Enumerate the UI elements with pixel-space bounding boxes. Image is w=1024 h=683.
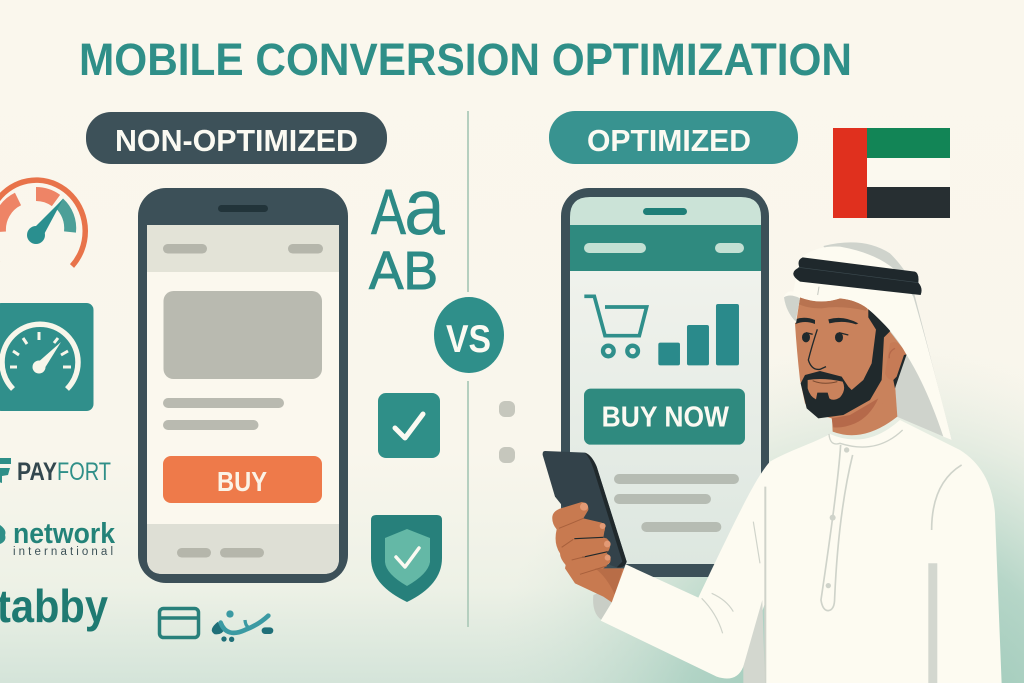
beard <box>801 329 884 418</box>
icon: speedometer orange <box>0 180 85 266</box>
headdress crease <box>818 287 819 295</box>
text placeholder lines <box>163 398 284 430</box>
face <box>795 297 907 418</box>
handheld phone <box>543 451 627 567</box>
logo: network international <box>0 518 116 558</box>
thobe side shadow <box>743 563 937 683</box>
headdress left fold <box>784 296 800 322</box>
buy button <box>163 456 322 503</box>
logo: PayFort: FORT <box>57 458 111 486</box>
headdress front <box>784 246 952 440</box>
headband seam <box>798 267 918 283</box>
thobe folds and seams <box>702 430 962 683</box>
logo: tabby: tabby <box>0 580 108 632</box>
decorative gray dots <box>499 401 515 463</box>
buy now button: BUY NOW <box>602 402 730 434</box>
icon: security shield <box>371 515 442 602</box>
center divider line <box>467 111 469 627</box>
logo: network international: network <box>13 518 116 550</box>
thobe body and arm <box>601 420 1002 683</box>
phone: optimized <box>561 188 769 577</box>
buy now button <box>584 389 745 445</box>
icon: typography samples <box>369 162 445 301</box>
buy button: BUY <box>217 466 267 497</box>
icon: shopping cart <box>584 296 647 356</box>
icon: typography samples: A <box>371 176 406 248</box>
heading pill: optimized <box>549 111 798 164</box>
neck shadow under beard <box>832 398 878 427</box>
eyelids and nose <box>806 329 848 369</box>
text placeholder lines <box>614 474 739 532</box>
forehead shadow <box>799 297 867 311</box>
eyes <box>802 332 843 342</box>
ear <box>885 342 906 380</box>
fingertips <box>580 503 611 561</box>
headband agal <box>793 257 922 295</box>
UAE flag <box>833 128 950 218</box>
heading pill: non-optimized <box>86 112 387 164</box>
head and headdress <box>784 242 952 440</box>
logo: PayFort <box>0 458 111 486</box>
icon: credit card <box>160 608 198 638</box>
VS badge <box>434 297 504 373</box>
finger creases <box>559 518 607 574</box>
hand <box>552 502 625 603</box>
heading pill: non-optimized: NON-OPTIMIZED <box>115 123 358 158</box>
hair behind ear <box>893 354 907 388</box>
phone speaker notch <box>218 205 268 212</box>
man in kandura holding phone <box>543 242 1002 683</box>
palm shadow <box>595 568 622 595</box>
icon: typography samples: AB <box>369 241 438 301</box>
neck <box>832 383 897 435</box>
image placeholder <box>164 291 322 379</box>
hair sideburn <box>868 308 891 337</box>
phone edge <box>585 453 627 567</box>
headdress back shadow <box>823 242 952 440</box>
logo: PayFort: PAY <box>17 458 57 486</box>
phone header bar <box>147 225 339 272</box>
ear inner shading <box>889 348 895 358</box>
icon: typography samples: a <box>404 162 445 251</box>
icon: rising bar chart <box>658 304 739 365</box>
thobe buttons <box>826 447 849 588</box>
heading pill: optimized: OPTIMIZED <box>587 123 751 158</box>
phone in hand and hand <box>543 451 627 603</box>
eyebrows <box>795 318 858 324</box>
logo: network international: international <box>13 546 113 558</box>
phone footer bar <box>147 524 339 574</box>
sleeve cuff shadow <box>593 592 613 620</box>
mouth and chin skin <box>808 379 844 400</box>
lips <box>813 381 837 383</box>
title: MOBILE CONVERSION OPTIMIZATION <box>79 34 852 85</box>
icon: checkbox <box>378 393 440 458</box>
VS badge: VS <box>446 318 491 361</box>
phone header bar <box>570 225 761 271</box>
finger gaps <box>574 537 608 557</box>
logo: Arabic payment mark <box>213 610 273 642</box>
phone speaker notch <box>643 208 687 215</box>
icon: speedometer on teal tile <box>0 303 94 411</box>
phone: non-optimized <box>138 188 348 583</box>
